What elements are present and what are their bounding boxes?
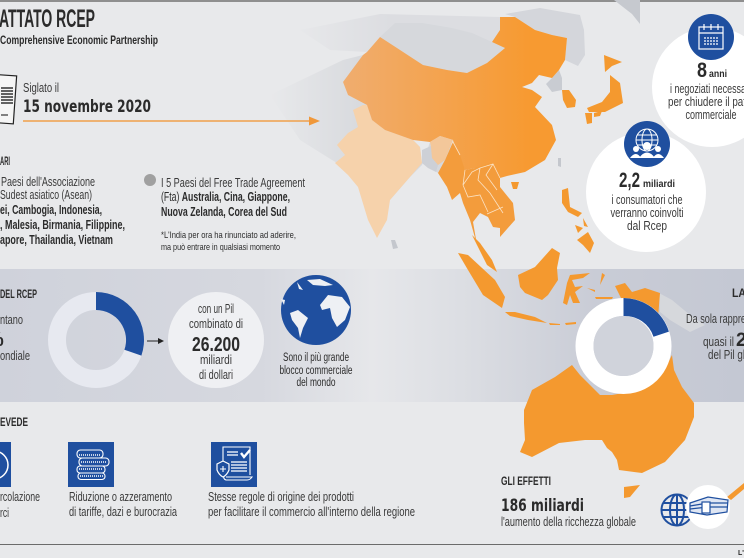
text: share of global GDP <box>686 312 744 362</box>
New Zealand <box>727 483 744 500</box>
heading: numbers of RCEP: DEL RCEP <box>0 287 37 301</box>
text: FTA countries: Nuova Zelanda, Corea del Sud <box>161 205 287 219</box>
Japan <box>604 55 622 72</box>
callout: 8 anni: 8 <box>697 59 707 82</box>
infographic canvas: ARI <box>0 154 10 168</box>
callout: 2,2 miliardi: 2,2 <box>619 169 640 192</box>
icon: globe and people <box>624 121 670 167</box>
signing date: Siglato il <box>23 81 59 95</box>
Papua <box>615 283 660 318</box>
text: world share: ondiale <box>0 349 30 363</box>
text: goods circulation: rcolazione <box>0 490 40 504</box>
icon: coin stacks <box>68 442 114 487</box>
heading: what it provides: EVEDE <box>0 415 28 429</box>
arrow: donut to GDP <box>147 338 164 344</box>
South Korea <box>562 90 576 108</box>
donut chart: 30 percent <box>57 292 144 379</box>
callout: 2,2 miliardi: i consumatori che <box>612 193 683 207</box>
text: world share <box>0 313 30 363</box>
map: India (light orange) <box>335 105 422 238</box>
signing date <box>23 81 151 116</box>
panel: effects: GLI EFFETTI <box>501 474 551 488</box>
icon: banknotes <box>686 485 730 529</box>
text: rules of origin <box>208 490 415 519</box>
map: internal country borders <box>453 142 503 214</box>
text: ASEAN countries: ei, Cambogia, Indonesia, <box>0 203 102 217</box>
text: largest trade bloc: blocco commerciale <box>280 365 352 377</box>
panel: effects <box>501 474 636 529</box>
text: largest trade bloc: Sono il più grande <box>283 352 349 364</box>
callout: 2,2 miliardi: miliardi <box>643 179 675 190</box>
Sumatra <box>458 253 505 308</box>
title: ATTATO RCEP <box>0 5 95 33</box>
icon: certificate and shield <box>211 442 257 487</box>
Malay peninsula <box>472 235 497 272</box>
Tasmania <box>624 485 640 498</box>
text: ASEAN countries: , Malesia, Birmania, Filippine, <box>0 218 125 232</box>
legend dot: FTA <box>144 174 156 186</box>
text: tariff reduction: Riduzione o azzeramento <box>69 490 172 504</box>
text: goods circulation <box>0 490 40 520</box>
panel: effects: l'aumento della ricchezza globale <box>501 515 636 529</box>
donut chart: 20 percent <box>584 298 669 385</box>
footnote: India: ma può entrare in qualsiasi momento <box>161 242 280 253</box>
icon: wire globe <box>662 494 692 526</box>
footnote: India: *L'India per ora ha rinunciato ad aderire, <box>161 230 296 241</box>
Java <box>505 312 547 323</box>
text: world share: ntano <box>0 313 23 327</box>
bottom rule and credit: L' <box>738 550 744 557</box>
panel: effects: 186 miliardi <box>501 496 584 515</box>
text: FTA countries: I 5 Paesi del Free Trade Agreement <box>161 176 305 190</box>
panel: grey data band <box>0 269 744 402</box>
text: ASEAN countries: Sudest asiatico (Asean) <box>0 188 92 202</box>
text: rules of origin: per facilitare il commercio all'interno della regione <box>208 505 415 519</box>
callout: combined GDP <box>168 292 264 388</box>
text: share of global GDP: quasi il <box>703 335 734 349</box>
text: rules of origin: Stesse regole di origine dei prodotti <box>208 490 354 504</box>
icon: calendar <box>688 14 734 60</box>
icon: earth globe <box>281 275 351 345</box>
map: member countries (orange) <box>343 17 744 500</box>
map: non-member countries <box>270 0 705 332</box>
subtitle: Comprehensive Economic Partnership <box>0 35 158 47</box>
icon: goods circulation <box>0 442 11 487</box>
callout: combined GDP: 26.200 <box>192 334 240 356</box>
Maluku <box>600 273 605 285</box>
Borneo <box>518 248 560 300</box>
text: tariff reduction: di tariffe, dazi e burocrazia <box>69 505 177 519</box>
text: FTA countries: (Fta) Australia, Cina, Giappone, <box>161 190 290 204</box>
callout: 2,2 miliardi: dal Rcep <box>627 219 667 233</box>
China <box>343 17 567 178</box>
callout: 2,2 miliardi <box>586 121 706 252</box>
callout: 8 anni <box>652 14 744 147</box>
signing date: 15 novembre 2020 <box>23 97 151 116</box>
callout: 8 anni: anni <box>709 69 727 80</box>
callout: combined GDP: miliardi <box>200 353 232 367</box>
icon: signed document <box>0 74 17 124</box>
Philippines <box>562 188 582 217</box>
map: NE India <box>430 136 453 165</box>
text: ASEAN countries: Paesi dell'Associazione <box>1 175 95 189</box>
text: tariff reduction <box>69 490 177 519</box>
text: goods circulation: rci <box>0 506 9 520</box>
arrow: date to map <box>23 116 320 126</box>
text: largest trade bloc <box>280 352 352 389</box>
text: FTA countries <box>161 176 305 219</box>
footnote: India <box>161 230 296 253</box>
text: ASEAN countries: apore, Thailandia, Vietnam <box>0 233 113 247</box>
callout: combined GDP: combinato di <box>189 317 243 331</box>
callout: combined GDP: con un Pil <box>198 302 234 316</box>
Hainan <box>511 182 519 189</box>
text: largest trade bloc: del mondo <box>296 377 336 389</box>
Indochina <box>438 142 515 245</box>
Sulawesi <box>563 273 590 305</box>
Australia <box>520 355 694 473</box>
text: ASEAN countries <box>0 175 125 247</box>
callout: 2,2 miliardi: verranno coinvolti <box>610 206 684 220</box>
callout: combined GDP: di dollari <box>199 368 233 382</box>
